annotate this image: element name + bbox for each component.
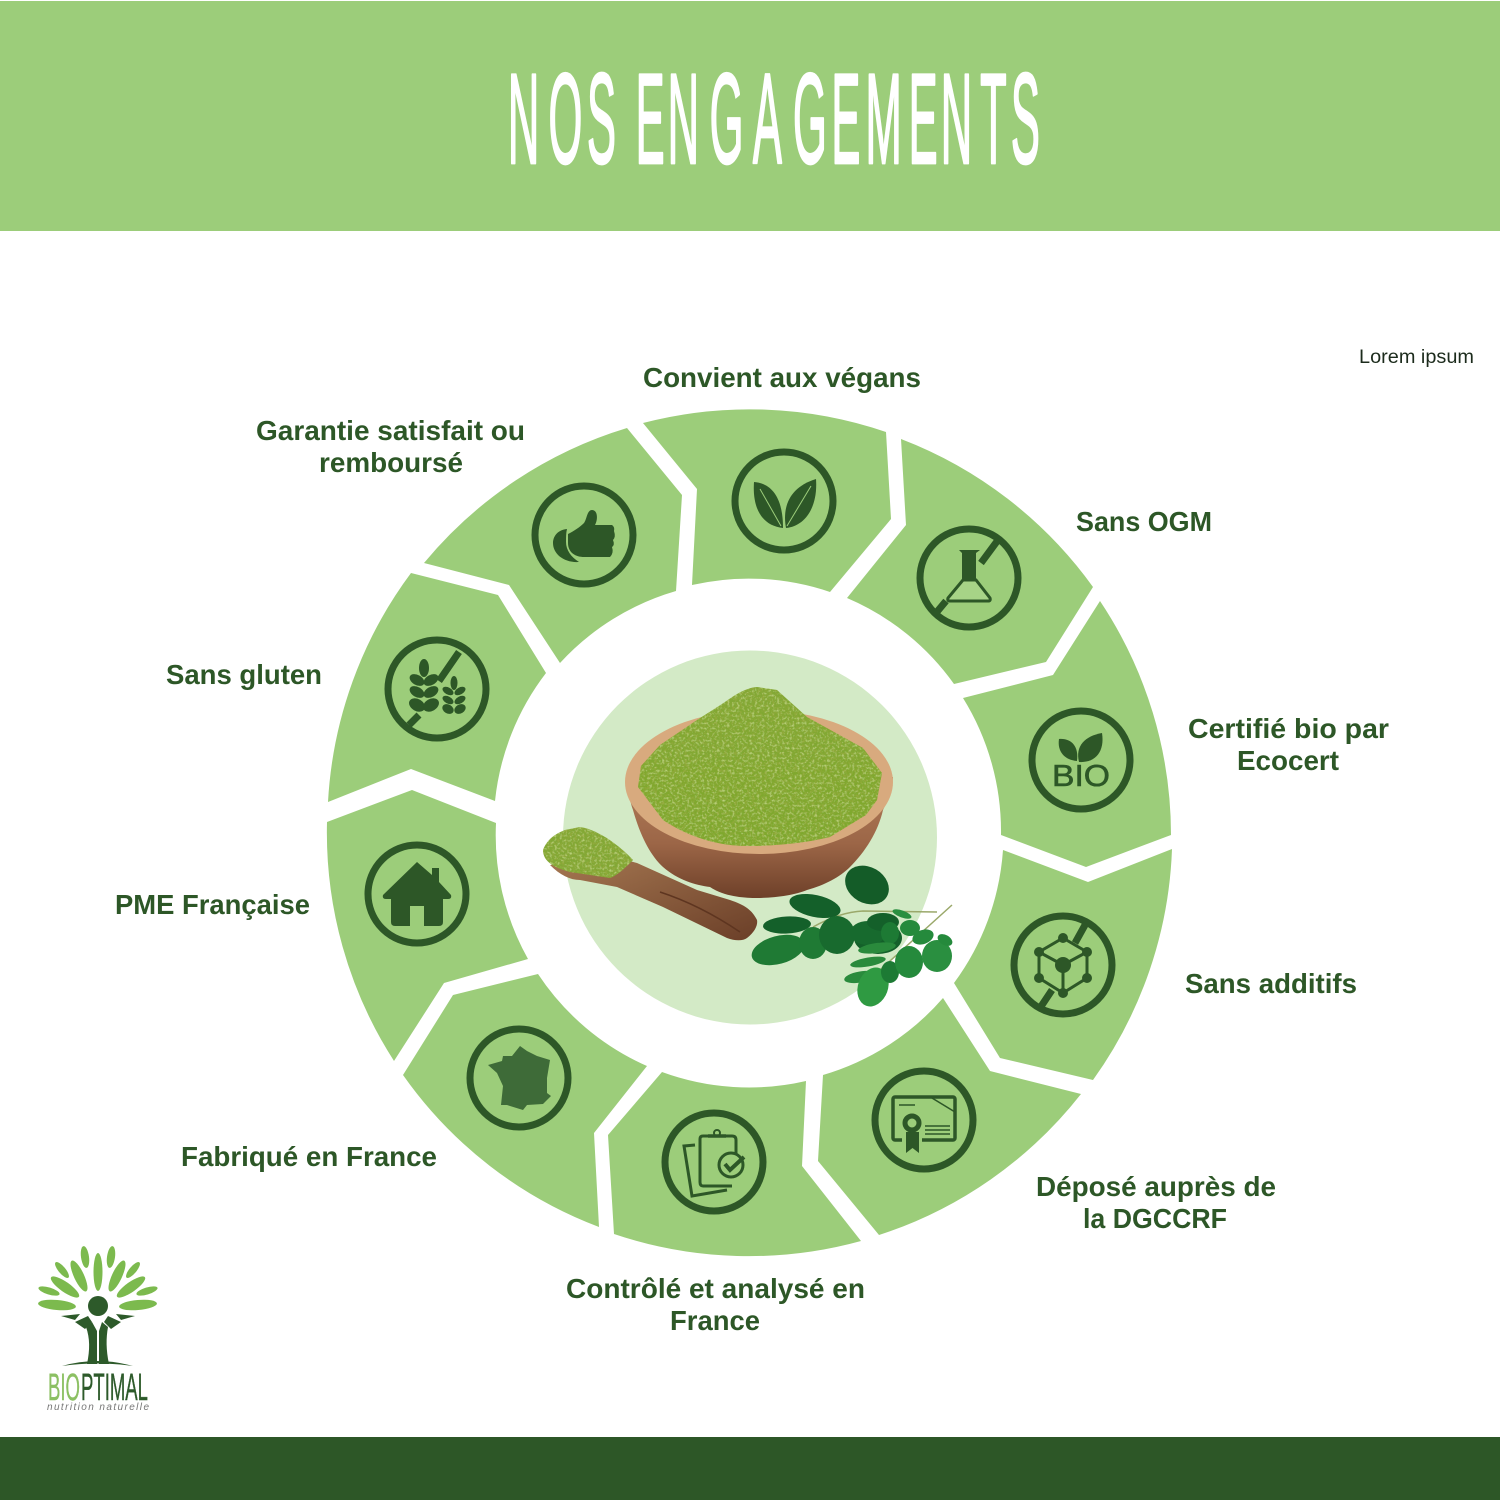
moringa leaves xyxy=(748,858,954,1011)
small text: Lorem ipsum: Lorem ipsum xyxy=(1359,347,1474,368)
label: Certifié bio par Ecocert: Certifié bio par xyxy=(1188,713,1389,744)
icon: no additives molecule xyxy=(1014,916,1112,1014)
header band xyxy=(0,1,1500,231)
segment: Fabriqué en France xyxy=(403,974,647,1227)
segment: Déposé DGCCRF xyxy=(818,998,1081,1235)
icon: clipboard with check xyxy=(665,1113,763,1211)
label: Convient aux végans: Convient aux végans xyxy=(643,362,921,393)
label: Sans gluten: Sans gluten xyxy=(166,659,322,690)
icons xyxy=(368,452,1130,1211)
label: Garantie satisfait ou remboursé: remboursé xyxy=(319,447,463,478)
spoon xyxy=(543,827,757,940)
product illustration: bowl, spoon and moringa leaves xyxy=(543,687,954,1011)
segment: Sans additifs xyxy=(954,849,1172,1080)
label: Sans OGM: Sans OGM xyxy=(1076,506,1212,537)
label: Déposé auprès de la DGCCRF xyxy=(1036,1171,1276,1234)
label: Déposé auprès de la DGCCRF: la DGCCRF xyxy=(1083,1203,1227,1234)
label: Garantie satisfait ou remboursé xyxy=(256,415,525,478)
icon: map of France xyxy=(470,1029,568,1127)
logo tree trunk xyxy=(61,1296,135,1366)
logo: Bioptimal xyxy=(37,1246,159,1413)
logo tree crown xyxy=(37,1246,159,1312)
segment: Contrôlé et analysé xyxy=(608,1072,861,1256)
segment: Certifié bio xyxy=(963,601,1171,867)
label: Contrôlé et analysé en France: France xyxy=(670,1305,760,1336)
logo wordmark: BIO xyxy=(48,1367,80,1409)
icon: BIO: BIO xyxy=(1052,758,1110,793)
bowl xyxy=(625,710,893,898)
label: Certifié bio par Ecocert: Ecocert xyxy=(1237,745,1339,776)
label: Certifié bio par Ecocert xyxy=(1188,713,1389,776)
segment: Convient aux végans xyxy=(643,409,891,592)
label: Fabriqué en France: Fabriqué en France xyxy=(181,1141,437,1172)
label: Contrôlé et analysé en France: Contrôlé et analysé en xyxy=(566,1273,865,1304)
segment: Sans gluten xyxy=(328,573,546,802)
label: PME Française: PME Française xyxy=(115,889,310,920)
label: Sans additifs: Sans additifs xyxy=(1185,968,1357,999)
icon: certificate xyxy=(875,1071,973,1169)
logo: Bioptimal: PTIMAL xyxy=(81,1367,148,1409)
powder pile xyxy=(638,687,882,846)
logo wordmark xyxy=(48,1367,148,1409)
icon: no GMO flask xyxy=(920,529,1018,627)
logo tagline: nutrition naturelle xyxy=(47,1402,149,1413)
icon: no gluten wheat xyxy=(388,640,486,738)
icon: vegan leaves xyxy=(735,452,833,550)
icon: thumbs up xyxy=(535,486,633,584)
labels xyxy=(115,362,1389,1336)
ring of commitment segments xyxy=(327,409,1172,1256)
footer band xyxy=(0,1437,1500,1500)
segment: Garantie satisfait xyxy=(424,428,682,663)
label: Contrôlé et analysé en France xyxy=(566,1273,865,1336)
segment: PME Française xyxy=(327,790,528,1061)
title: NOS ENGAGEMENTS xyxy=(508,48,1040,191)
icon: BIO xyxy=(1032,711,1130,809)
segment: Sans OGM xyxy=(847,439,1093,684)
label: Garantie satisfait ou remboursé: Garantie satisfait ou xyxy=(256,415,525,446)
centre pale circle xyxy=(563,650,937,1024)
icon: house xyxy=(368,845,466,943)
label: Déposé auprès de la DGCCRF: Déposé auprès de xyxy=(1036,1171,1276,1202)
